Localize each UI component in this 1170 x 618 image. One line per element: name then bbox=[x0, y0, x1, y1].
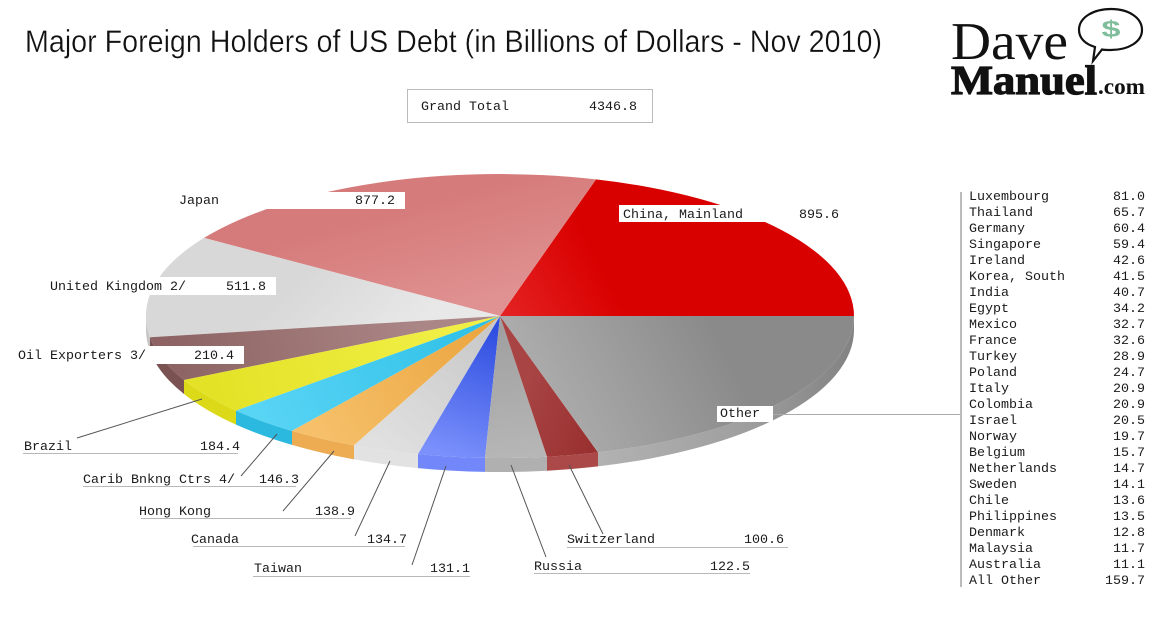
other countries table: Thailand bbox=[969, 206, 1033, 221]
label: Canada: Canada bbox=[191, 533, 239, 548]
slice: Other bbox=[500, 316, 854, 452]
label: United Kingdom: 511.8 bbox=[226, 280, 266, 295]
title: Major Foreign Holders of US Debt (in Billions of Dollars - Nov 2010) bbox=[25, 23, 882, 59]
other countries table: 34.2 bbox=[1113, 302, 1145, 317]
label: Hong Kong: Hong Kong bbox=[139, 505, 211, 520]
other countries table: Australia bbox=[969, 558, 1041, 573]
slice: Taiwan bbox=[418, 316, 500, 458]
label: Other with connector bbox=[717, 406, 961, 422]
other countries table: Turkey bbox=[969, 350, 1017, 365]
label: Russia: 122.5 bbox=[710, 560, 750, 575]
other countries table: 41.5 bbox=[1113, 270, 1145, 285]
other countries table: 20.9 bbox=[1113, 382, 1145, 397]
label: Oil Exporters: Oil Exporters 3/ bbox=[18, 349, 146, 364]
other countries table: 24.7 bbox=[1113, 366, 1145, 381]
other countries table: Korea, South bbox=[969, 270, 1065, 285]
other countries table: Denmark bbox=[969, 526, 1025, 541]
label: Japan bbox=[170, 192, 405, 209]
label: Switzerland: Switzerland bbox=[567, 533, 655, 548]
other countries table: Colombia bbox=[969, 398, 1033, 413]
other countries table: Germany bbox=[969, 222, 1025, 237]
other countries table: 13.6 bbox=[1113, 494, 1145, 509]
other countries table: 159.7 bbox=[1105, 574, 1145, 589]
label: Brazil: 184.4 bbox=[200, 440, 240, 455]
label: Canada: 134.7 bbox=[367, 533, 407, 548]
label: Taiwan: Taiwan bbox=[254, 562, 302, 577]
other countries table: 81.0 bbox=[1113, 190, 1145, 205]
label: Carib Bnkng Ctrs bbox=[83, 434, 299, 488]
pie chart bbox=[146, 174, 854, 472]
label: Hong Kong: 138.9 bbox=[315, 505, 355, 520]
label: Taiwan: 131.1 bbox=[430, 562, 470, 577]
label: Other with connector: Other bbox=[720, 407, 760, 422]
other countries table: Malaysia bbox=[969, 542, 1033, 557]
other countries table bbox=[960, 190, 1145, 589]
slice: Japan bbox=[204, 174, 596, 316]
label: Hong Kong bbox=[139, 451, 355, 520]
label: China, Mainland bbox=[619, 205, 845, 223]
other countries table: Italy bbox=[969, 382, 1009, 397]
logo: DaveManuel.com bbox=[951, 9, 1145, 103]
other countries table: Philippines bbox=[969, 510, 1057, 525]
other countries table: Sweden bbox=[969, 478, 1017, 493]
logo: DaveManuel.com: Manuel bbox=[951, 57, 1097, 103]
label: Carib Bnkng Ctrs: Carib Bnkng Ctrs 4/ bbox=[83, 473, 235, 488]
label: Russia: Russia bbox=[534, 560, 582, 575]
logo icon: speech bubble with dollar sign bbox=[1079, 9, 1142, 61]
label: Japan: Japan bbox=[179, 194, 219, 209]
label: United Kingdom: United Kingdom 2/ bbox=[50, 280, 186, 295]
label: Russia bbox=[511, 465, 750, 575]
slice: Brazil bbox=[184, 316, 500, 411]
label: Oil Exporters bbox=[10, 346, 244, 364]
other countries table: Belgium bbox=[969, 446, 1025, 461]
label: Oil Exporters: 210.4 bbox=[194, 349, 234, 364]
label: Switzerland bbox=[567, 465, 788, 548]
other countries table: 59.4 bbox=[1113, 238, 1145, 253]
other countries table: India bbox=[969, 286, 1009, 301]
other countries table: Singapore bbox=[969, 238, 1041, 253]
other countries table: 11.1 bbox=[1113, 558, 1145, 573]
label: Switzerland: 100.6 bbox=[744, 533, 784, 548]
label: United Kingdom bbox=[40, 277, 276, 295]
slice: Hong Kong bbox=[292, 316, 500, 445]
other countries table: 28.9 bbox=[1113, 350, 1145, 365]
grand total box: 4346.8 bbox=[589, 100, 637, 115]
other countries table: Ireland bbox=[969, 254, 1025, 269]
slice: Carib Bnkng Ctrs bbox=[236, 316, 500, 431]
other countries table: 19.7 bbox=[1113, 430, 1145, 445]
other countries table: 13.5 bbox=[1113, 510, 1145, 525]
slice: Switzerland bbox=[500, 316, 598, 457]
label: Carib Bnkng Ctrs: 146.3 bbox=[259, 473, 299, 488]
label: Japan: 877.2 bbox=[355, 194, 395, 209]
pie side wall bbox=[146, 316, 854, 472]
other countries table: 40.7 bbox=[1113, 286, 1145, 301]
other countries table: 15.7 bbox=[1113, 446, 1145, 461]
slice: Canada bbox=[354, 316, 500, 454]
other countries table: Netherlands bbox=[969, 462, 1057, 477]
label: Taiwan bbox=[253, 466, 470, 577]
other countries table: Israel bbox=[969, 414, 1017, 429]
slice: Oil Exporters bbox=[150, 316, 500, 380]
other countries table: All Other bbox=[969, 574, 1041, 589]
other countries table: 42.6 bbox=[1113, 254, 1145, 269]
other countries table: 32.7 bbox=[1113, 318, 1145, 333]
label: China, Mainland: 895.6 bbox=[799, 208, 839, 223]
label: Canada bbox=[191, 461, 407, 548]
other countries table: 20.9 bbox=[1113, 398, 1145, 413]
other countries table: 12.8 bbox=[1113, 526, 1145, 541]
other countries table: Poland bbox=[969, 366, 1017, 381]
grand total box bbox=[408, 90, 652, 122]
logo icon: speech bubble with dollar sign: $ bbox=[1102, 16, 1121, 42]
grand total box: Grand Total bbox=[421, 100, 509, 115]
other countries table: 14.1 bbox=[1113, 478, 1145, 493]
logo: DaveManuel.com: .com bbox=[1098, 74, 1145, 99]
other countries table: 65.7 bbox=[1113, 206, 1145, 221]
other countries table: 11.7 bbox=[1113, 542, 1145, 557]
other countries table: 14.7 bbox=[1113, 462, 1145, 477]
other countries table: 32.6 bbox=[1113, 334, 1145, 349]
other countries table: Norway bbox=[969, 430, 1017, 445]
slice: Russia bbox=[485, 316, 547, 458]
other countries table: Mexico bbox=[969, 318, 1017, 333]
other countries table: 60.4 bbox=[1113, 222, 1145, 237]
other countries table: Egypt bbox=[969, 302, 1009, 317]
other countries table: Luxembourg bbox=[969, 190, 1049, 205]
label: Brazil bbox=[23, 399, 240, 455]
label: China, Mainland: China, Mainland bbox=[623, 208, 743, 223]
logo: DaveManuel.com: Dave bbox=[951, 13, 1068, 71]
other countries table: France bbox=[969, 334, 1017, 349]
label: Brazil: Brazil bbox=[24, 440, 72, 455]
other countries table: Chile bbox=[969, 494, 1009, 509]
other countries table: 20.5 bbox=[1113, 414, 1145, 429]
slice: China, Mainland bbox=[500, 179, 854, 316]
slice: United Kingdom bbox=[146, 238, 500, 337]
